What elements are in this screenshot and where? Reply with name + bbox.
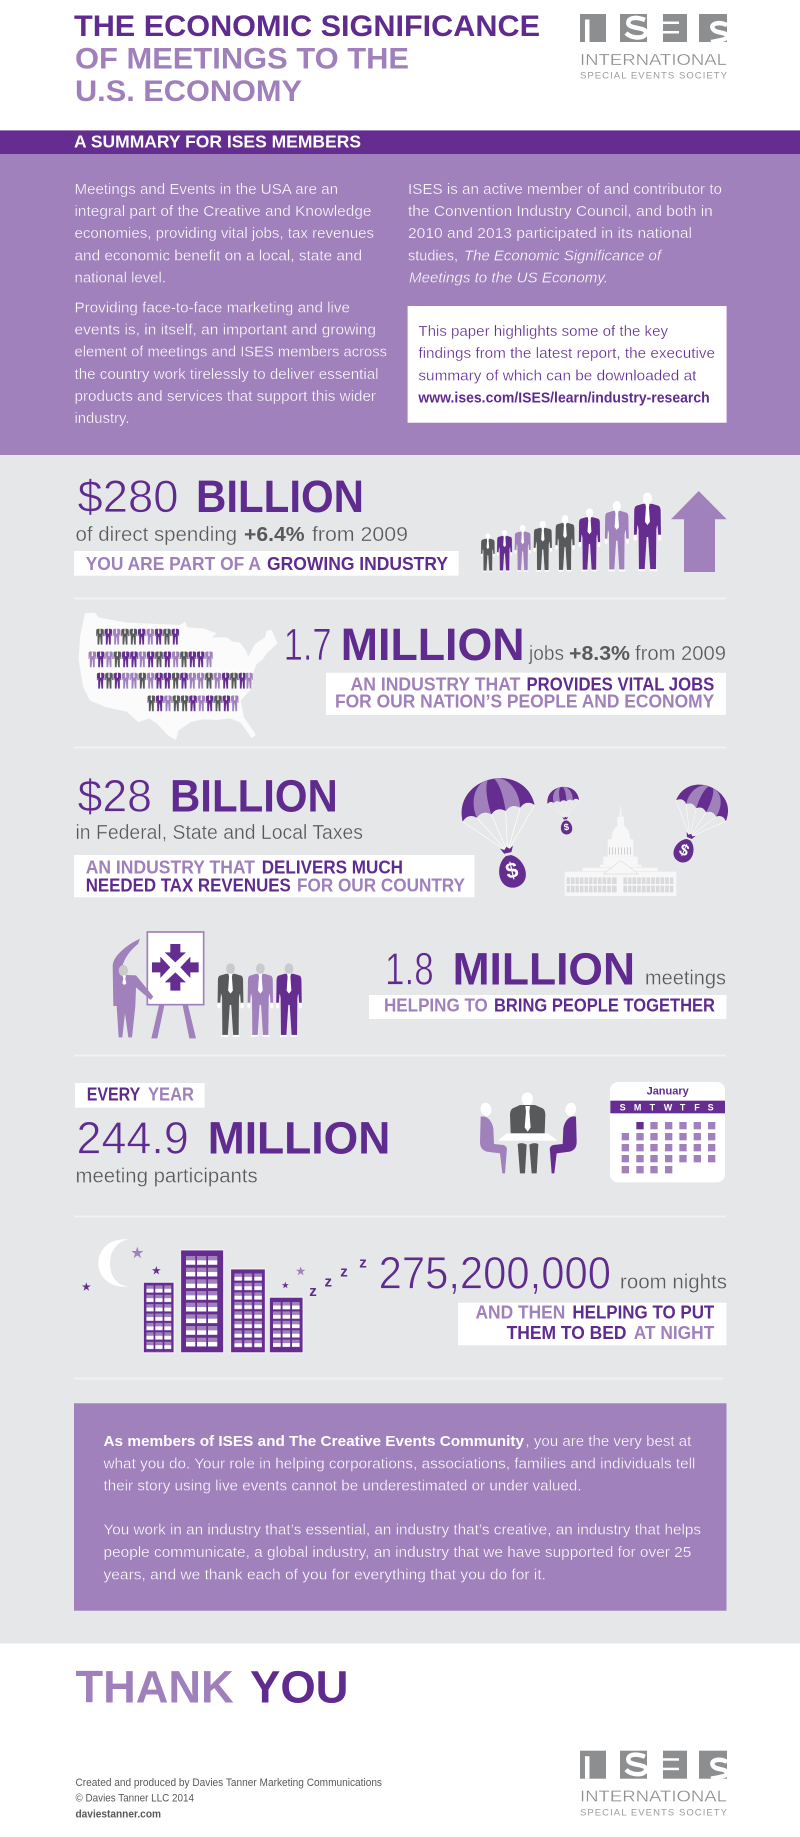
panel: thank you message (74, 1403, 726, 1611)
heading: thank you: YOU (250, 1661, 348, 1712)
logo: ISES footer: INTERNATIONAL (580, 1789, 727, 1806)
logo: ISES header (580, 14, 728, 82)
icon: hotel buildings (143, 1250, 303, 1353)
text: direct spending: from 2009 (312, 524, 408, 546)
icon: calendar (610, 1082, 725, 1182)
text: room nights: room nights (620, 1272, 727, 1294)
text block: message: years, and we thank each of you for everything that you do for it. (104, 1566, 546, 1583)
text block: credits: daviestanner.com (76, 1808, 161, 1820)
icon: calendar: M (634, 1102, 641, 1112)
heading: 244.9 million (76, 1112, 390, 1163)
panel: 244.9 million participants (75, 1082, 725, 1188)
text block: left column: Meetings and Events in the USA are an (74, 181, 338, 198)
text block: left column: Providing face-to-face marketing and live (74, 299, 350, 316)
icon: small parachute money bag (546, 785, 583, 836)
callout: growing industry (74, 551, 459, 576)
text: taxes: in Federal, State and Local Taxes (76, 822, 363, 844)
panel: $280 billion (74, 471, 727, 576)
icon: sleeping z letters: z (325, 1274, 332, 1291)
heading: 1.7 million: 1.7 (284, 619, 332, 670)
arrow: growth (671, 491, 727, 572)
heading: 244.9 million: 244.9 (76, 1112, 189, 1163)
icon: calendar: January (647, 1085, 690, 1097)
icon: calendar: T (680, 1102, 686, 1112)
callout: tax revenues: NEEDED TAX REVENUES (86, 876, 291, 896)
heading: $28 billion: BILLION (170, 770, 338, 821)
callout: put them to bed: THEM TO BED (507, 1323, 626, 1343)
icon: capitol building (564, 803, 677, 896)
text: jobs growth: from 2009 (635, 643, 726, 665)
callout: every year: EVERY (87, 1084, 140, 1104)
icon: calendar: T (650, 1102, 656, 1112)
text block: message: what you do. Your role in helping corporations, associations, families and individuals tell (102, 1455, 695, 1472)
text block: left column: integral part of the Creative and Knowledge (74, 203, 372, 220)
heading: thank you: THANK (76, 1661, 234, 1712)
text block: right column: the Convention Industry Council, and both in (408, 203, 713, 220)
text block: left column: products and services that support this wider (74, 388, 376, 405)
icon: large parachute money bag (455, 771, 552, 896)
icon: calendar: W (664, 1102, 673, 1112)
icon: calendar: F (694, 1102, 700, 1112)
panel: summary band: A SUMMARY FOR ISES MEMBERS (74, 132, 361, 152)
text block: message (102, 1433, 701, 1583)
heading: 275,200,000: 275,200,000 (379, 1247, 611, 1298)
text block: credits (76, 1777, 382, 1820)
callout: tax revenues: AN INDUSTRY THAT (86, 857, 255, 877)
heading: $28 billion: $28 (78, 770, 152, 821)
icon: people at a table (479, 1092, 577, 1173)
callout: vital jobs: PROVIDES VITAL JOBS (526, 675, 714, 695)
text block: left column: the country work tirelessly to deliver essential (74, 366, 378, 383)
title: OF MEETINGS TO THE (75, 43, 409, 76)
logo: ISES footer (580, 1751, 728, 1819)
icon: sleeping z letters: z (340, 1263, 348, 1280)
text: jobs growth: jobs (528, 643, 564, 665)
text block: message: their story using live events cannot be underestimated or under valued. (104, 1477, 582, 1494)
text block: right column: studies, (408, 248, 458, 264)
text block: left column: national level. (74, 270, 166, 287)
icon: sleeping z letters: z (359, 1255, 367, 1272)
panel: $28 billion (74, 770, 736, 897)
heading: $280 billion (78, 471, 364, 522)
callout: tax revenues: FOR OUR COUNTRY (297, 876, 465, 896)
text block: right column: The Economic Significance of (464, 248, 663, 264)
callout: vital jobs: FOR OUR NATION’S PEOPLE AND ECONOMY (335, 692, 714, 712)
icon: parachutes and capitol (455, 771, 736, 896)
icon: medium parachute money bag: $ (676, 840, 692, 860)
text block: message: As members of ISES and The Creative Events Community (104, 1433, 525, 1450)
logo: ISES footer: SPECIAL EVENTS SOCIETY (580, 1808, 728, 1819)
heading: 1.8 million: MILLION (453, 943, 635, 994)
callout: put them to bed: AND THEN (476, 1303, 565, 1323)
callout: put them to bed (458, 1303, 726, 1345)
text block: right column: ISES is an active member of and contributor to (408, 181, 722, 198)
text block: right column: 2010 and 2013 participated in its national (408, 225, 692, 242)
text: jobs growth (528, 643, 726, 665)
panel: introduction (0, 154, 800, 455)
callout: report link: findings from the latest report, the executive (418, 345, 715, 362)
logo: ISES header: SPECIAL EVENTS SOCIETY (580, 71, 728, 82)
text block: right column: Meetings to the US Economy. (409, 270, 608, 287)
callout: put them to bed: HELPING TO PUT (572, 1303, 714, 1323)
panel: 1.7 million jobs (79, 613, 726, 740)
callout: growing industry: YOU ARE PART OF A (86, 554, 261, 574)
icon: audience (217, 963, 302, 1037)
icon: moon and stars (82, 1239, 305, 1291)
text block: credits: © Davies Tanner LLC 2014 (76, 1793, 194, 1805)
icon: flip chart (147, 932, 204, 1038)
text block: message: , you are the very best at (526, 1433, 692, 1450)
heading: 1.8 million: 1.8 (385, 943, 434, 994)
icon: growing row of people (481, 493, 661, 572)
text: direct spending (76, 524, 408, 546)
callout: every year: YEAR (148, 1084, 194, 1104)
callout: report link (408, 306, 727, 423)
callout: vital jobs (326, 673, 726, 715)
heading: 1.7 million: MILLION (341, 619, 524, 670)
heading: thank you (76, 1661, 348, 1712)
logo: ISES header: INTERNATIONAL (580, 52, 727, 69)
text block: message: people communicate, a global industry, an industry that we have supported for over 25 (104, 1544, 691, 1561)
callout: tax revenues (74, 855, 474, 897)
heading: $28 billion (78, 770, 338, 821)
text: meetings: meetings (645, 967, 726, 989)
text: jobs growth: +8.3% (569, 643, 630, 665)
text block: left column: economies, providing vital jobs, tax revenues (74, 225, 374, 242)
callout: growing industry: GROWING INDUSTRY (267, 554, 448, 574)
callout: report link: This paper highlights some of the key (418, 323, 669, 340)
text block: right column (408, 181, 722, 287)
heading: $280 billion: $280 (78, 471, 178, 522)
callout: report link: summary of which can be downloaded at (418, 367, 697, 384)
text block: left column: events is, in itself, an important and growing (74, 322, 376, 339)
icon: medium parachute money bag (654, 777, 736, 872)
text block: left column: element of meetings and ISES members across (74, 344, 387, 361)
title: THE ECONOMIC SIGNIFICANCE (74, 10, 540, 43)
text: direct spending: +6.4% (244, 524, 305, 546)
callout: tax revenues: DELIVERS MUCH (262, 857, 403, 877)
icon: presenter (113, 939, 157, 1037)
text block: left column: industry. (74, 410, 130, 427)
title (74, 10, 540, 108)
callout: bring people together: BRING PEOPLE TOGETHER (494, 996, 715, 1016)
icon: presenter and audience (113, 932, 302, 1038)
heading: $280 billion: BILLION (196, 471, 364, 522)
callout: bring people together (369, 995, 726, 1019)
text block: left column: and economic benefit on a local, state and (74, 248, 362, 264)
text block: left column (74, 181, 387, 427)
callout: put them to bed: AT NIGHT (634, 1323, 714, 1343)
text: direct spending: of direct spending (76, 524, 237, 546)
panel: 1.8 million meetings (113, 932, 726, 1038)
text: participants: meeting participants (76, 1166, 258, 1188)
icon: USA map with people (79, 613, 277, 740)
panel: 275,200,000 room nights (82, 1239, 727, 1353)
icon: small parachute money bag: $ (563, 822, 571, 833)
callout: every year (75, 1083, 205, 1108)
heading: 244.9 million: MILLION (208, 1112, 390, 1163)
text block: message: You work in an industry that’s essential, an industry that’s creative, an industry that helps (104, 1522, 701, 1539)
icon: calendar: S (708, 1102, 714, 1112)
panel: summary band (0, 130, 800, 154)
icon: large parachute money bag: $ (503, 857, 521, 884)
callout: bring people together: HELPING TO (384, 996, 488, 1016)
icon: calendar: S (620, 1102, 626, 1112)
icon: sleeping z letters: z (309, 1283, 317, 1300)
callout: vital jobs: AN INDUSTRY THAT (350, 675, 520, 695)
icon: sleeping z letters (309, 1255, 367, 1300)
title: U.S. ECONOMY (75, 75, 302, 108)
text block: credits: Created and produced by Davies Tanner Marketing Communications (76, 1777, 382, 1789)
callout: report link: www.ises.com/ISES/learn/industry-research (417, 390, 710, 407)
